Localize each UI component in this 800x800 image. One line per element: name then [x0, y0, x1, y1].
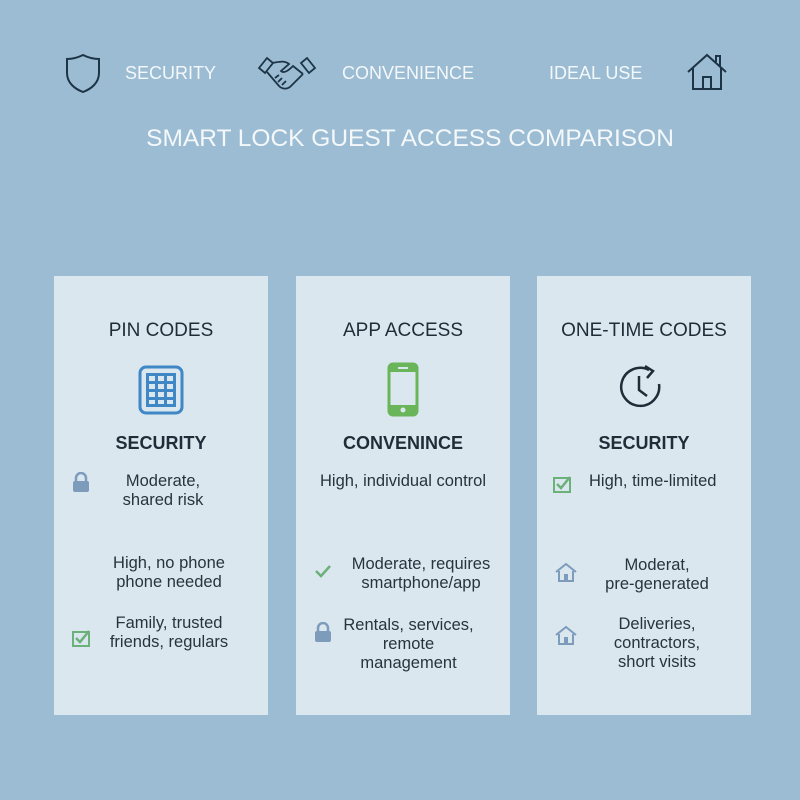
panel: pin codes: [54, 276, 268, 715]
text: ideal use: [343, 616, 474, 672]
text: convenience: smartphone/app: [361, 574, 481, 592]
subtitle: SECURITY: [598, 433, 690, 453]
text: security: High, individual control: [320, 472, 486, 490]
subtitle: CONVENINCE: [343, 433, 463, 453]
title: SMART LOCK GUEST ACCESS COMPARISON: [146, 125, 674, 152]
icon: smartphone: [388, 362, 418, 416]
header label: ideal use: IDEAL USE: [549, 63, 642, 83]
panel title: PIN CODES: [109, 320, 213, 341]
header icon: handshake: [258, 56, 316, 90]
text: convenience: pre-generated: [605, 575, 709, 593]
panel title: APP ACCESS: [343, 320, 463, 341]
text: ideal use: Rentals, services,: [343, 616, 474, 634]
icon: checkbox: [72, 630, 90, 647]
text: convenience: Moderat,: [624, 556, 690, 574]
header label: security: SECURITY: [125, 63, 216, 83]
text: ideal use: short visits: [618, 653, 696, 671]
icon: lock: [315, 622, 331, 642]
text: ideal use: remote: [383, 635, 434, 653]
text: security: [123, 472, 204, 509]
icon: house: [556, 626, 576, 645]
text: security: High, time-limited: [589, 472, 716, 490]
text: convenience: [352, 555, 490, 592]
panel title: ONE-TIME CODES: [561, 320, 727, 341]
text: ideal use: [110, 614, 228, 651]
icon: check: [315, 565, 331, 578]
text: ideal use: Deliveries,: [618, 615, 696, 633]
text: convenience: [113, 554, 225, 591]
icon: checkbox: [553, 476, 571, 493]
icon: house: [556, 562, 576, 582]
text: ideal use: contractors,: [614, 634, 700, 652]
panel: one-time codes: [537, 276, 751, 715]
text: convenience: phone needed: [116, 573, 222, 591]
text: convenience: High, no phone: [113, 554, 225, 572]
text: ideal use: management: [360, 654, 457, 672]
icon: keypad: [138, 366, 184, 414]
text: ideal use: Family, trusted: [116, 614, 222, 632]
subtitle: SECURITY: [115, 433, 206, 453]
header label: convenience: CONVENIENCE: [342, 63, 474, 83]
text: convenience: Moderate, requires: [352, 555, 490, 573]
header icon: shield: [66, 54, 100, 93]
icon: clock refresh: [620, 365, 660, 408]
panel: app access: [296, 276, 510, 715]
icon: lock: [73, 472, 89, 492]
text: security: Moderate,: [126, 472, 200, 490]
text: security: shared risk: [123, 491, 203, 509]
header icon: house: [687, 54, 727, 90]
text: ideal use: [614, 615, 700, 671]
text: ideal use: friends, regulars: [110, 633, 228, 651]
text: convenience: [605, 556, 709, 593]
